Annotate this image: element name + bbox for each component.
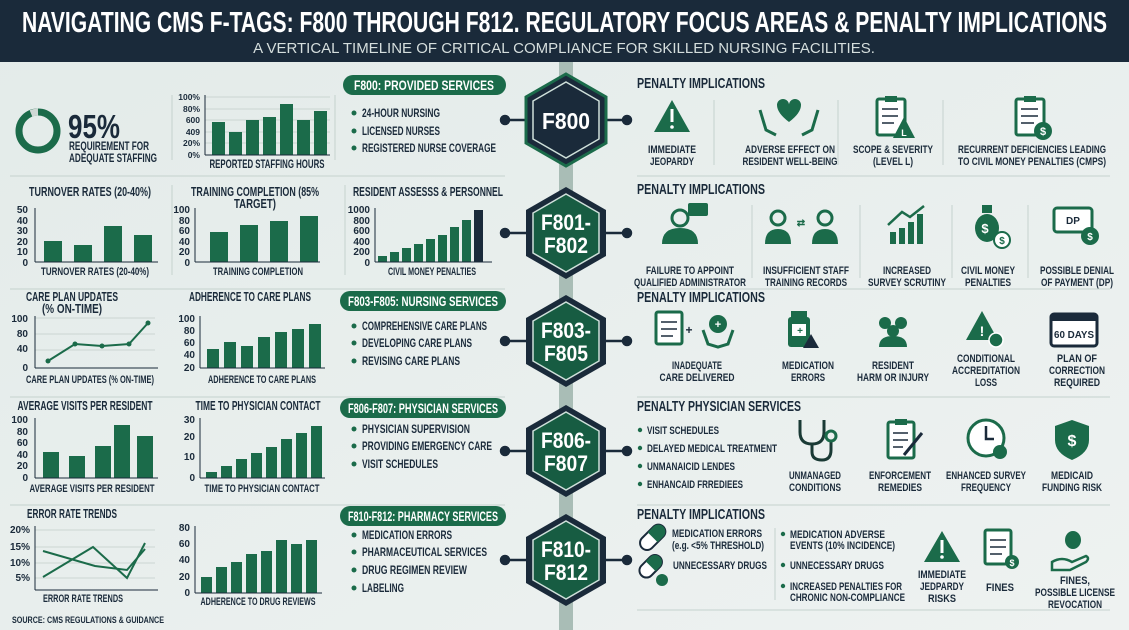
chart: civil money penalties: 0 [364, 258, 370, 269]
panel: F800 provided services: LICENSED NURSES [362, 126, 440, 138]
chart: adherence to drug reviews: 20 [179, 572, 190, 583]
penalty row 5: RISKS [928, 593, 956, 605]
icon: people [879, 317, 907, 347]
chart: error rate trends [10, 507, 158, 605]
penalty row 5: INCREASED PENALTIES FOR [790, 581, 902, 593]
penalty row 3: ACCREDITATION [952, 365, 1020, 377]
penalty row 5: JEDPARDY [920, 581, 964, 593]
icon: clipboard dollar: $ [1040, 126, 1046, 138]
chart: reported staffing hours [178, 92, 330, 171]
chart: reported staffing hours: REPORTED STAFFING HOURS [210, 159, 325, 171]
chart: reported staffing hours: 100% [178, 92, 200, 102]
icon: pill capsule [637, 522, 668, 553]
chart: error rate trends: ERROR RATE TRENDS [43, 593, 123, 605]
penalty row 4: FREQUENCY [961, 482, 1011, 494]
chart: training completion: 0 [184, 258, 190, 269]
icon: shield dollar [1055, 420, 1089, 460]
chart: adherence to drug reviews: 60 [179, 539, 190, 550]
source note: SOURCE: CMS REGULATIONS & GUIDANCE [12, 615, 164, 626]
icon: heart hands [760, 99, 818, 135]
hexagon: F810-F812: F810- [541, 537, 591, 562]
chart: care plan updates: (% ON-TIME) [42, 302, 102, 316]
chart: civil money penalties: 400 [353, 237, 370, 248]
penalty row 1: ADVERSE EFFECT ON [745, 144, 835, 156]
penalty row 5: EVENTS (10% INCIDENCE) [790, 540, 895, 552]
icon: calendar 60 days: 60 DAYS [1054, 330, 1094, 341]
penalty row 3: REQUIRED [1054, 377, 1100, 389]
hexagon: F806-F807: F806- [541, 428, 591, 453]
icon: money bag: $ [999, 236, 1005, 247]
penalty row 3: LOSS [975, 377, 997, 389]
chart: turnover rates [17, 185, 158, 278]
panel: F806-F807 physician services: PROVIDING EMERGENCY CARE [362, 441, 492, 453]
hexagon: F810-F812: F812 [544, 560, 588, 585]
penalty row 3: CARE DELIVERED [660, 372, 735, 384]
icon: care plan + hands: + [715, 319, 721, 331]
penalty row 1 [637, 75, 1106, 168]
penalty row 3: CONDITIONAL [957, 353, 1015, 365]
penalty row 5 [637, 506, 1115, 611]
chart: reported staffing hours: 20% [183, 138, 200, 148]
penalty row 2: TRAINING RECORDS [765, 277, 847, 289]
icon: medication bottle: + [797, 326, 803, 337]
penalty row 2: INCREASED [883, 265, 931, 277]
chart: time to physician contact: 10 [184, 452, 195, 463]
penalty row 5: MEDICATION ERRORS [672, 528, 762, 540]
chart: civil money penalties: 1000 [348, 205, 370, 216]
penalty row 1: IMMEDIATE [648, 144, 696, 156]
chart: average visits per resident: AVERAGE VISITS PER RESIDENT [18, 399, 153, 413]
penalty row 4: UNMANAICID LENDES [647, 461, 735, 473]
penalty row 5: (e.g. <5% THRESHOLD) [672, 540, 764, 552]
chart: average visits per resident: 40 [17, 450, 28, 461]
penalty row 1: (LEVEL L) [873, 156, 913, 168]
chart: time to physician contact: 0 [189, 473, 195, 484]
panel: F800 provided services [343, 75, 506, 155]
icon: calendar 60 days [1051, 314, 1097, 346]
penalty row 3: INADEQUATE [672, 360, 722, 372]
icon: money bag [975, 205, 1010, 248]
icon: medication bottle [788, 311, 819, 348]
penalty row 4: ENFORCEMENT [869, 470, 931, 482]
chart: average visits per resident: 60 [17, 438, 28, 449]
chart: training completion: 20 [179, 247, 190, 258]
icon: clock [968, 420, 1007, 459]
panel: F806-F807 physician services: F806-F807: PHYSICIAN SERVICES [348, 401, 498, 416]
penalty row 4: DELAYED MEDICAL TREATMENT [647, 443, 777, 455]
icon: clipboard level L [877, 96, 915, 138]
chart: training completion [173, 185, 320, 278]
stat: 95% staffing: 95% [68, 108, 120, 145]
stat: 95% staffing: ADEQUATE STAFFING [69, 153, 157, 165]
penalty row 3: CORRECTION [1049, 365, 1105, 377]
hexagon: F803-F805: F805 [544, 341, 588, 366]
penalty row 3: ERRORS [791, 372, 825, 384]
icon: doctor nurse [765, 211, 838, 244]
hexagon: F800 [526, 74, 606, 166]
icon: warning [654, 100, 690, 132]
chart: error rate trends: ERROR RATE TRENDS [27, 507, 117, 521]
chart: adherence to drug reviews: 40 [179, 555, 190, 566]
panel: F810-F812 pharmacy services [340, 506, 506, 595]
chart: adherence to drug reviews [179, 523, 322, 608]
chart: adherence to care plans: ADHERENCE TO CARE PLANS [189, 290, 311, 304]
stat: 95% staffing: REQUIREMENT FOR [69, 141, 149, 153]
icon: warning [924, 531, 960, 562]
penalty row 5: UNNECESSARY DRUGS [673, 560, 767, 572]
penalty row 5: REVOCATION [1048, 599, 1102, 611]
icon: money bag: $ [981, 221, 989, 236]
hexagon: F806-F807: F807 [544, 451, 588, 476]
chart: turnover rates: 50 [17, 205, 28, 216]
chart: training completion: 40 [179, 237, 190, 248]
penalty row 4: FUNDING RISK [1042, 482, 1102, 494]
hexagon: F806-F807 [526, 405, 606, 497]
penalty row 2: FAILURE TO APPOINT [646, 265, 734, 277]
chart: turnover rates: TURNOVER RATES (20-40%) [29, 185, 151, 199]
chart: error rate trends: 20% [10, 525, 30, 536]
chart: time to physician contact: TIME TO PHYSICIAN CONTACT [204, 483, 320, 495]
panel: F806-F807 physician services [340, 398, 506, 471]
chart: adherence to care plans: 40 [184, 350, 195, 361]
chart: care plan updates: 80 [17, 329, 28, 340]
chart: turnover rates: 0 [22, 258, 28, 269]
penalty row 4: ENHANCED SURVEY [946, 470, 1026, 482]
chart: turnover rates: TURNOVER RATES (20-40%) [41, 266, 149, 278]
panel: F803-F805 nursing services: COMPREHENSIVE CARE PLANS [362, 321, 487, 333]
icon: care plan + hands [656, 312, 733, 347]
penalty row 4: UNMANAGED [789, 470, 841, 482]
chart: adherence to care plans: 100 [178, 314, 195, 325]
penalty row 2: QUALIFIED ADMINISTRATOR [634, 277, 746, 289]
chart: care plan updates: 100 [11, 314, 28, 325]
panel: F800 provided services: REGISTERED NURSE COVERAGE [362, 143, 496, 155]
panel: F810-F812 pharmacy services: F810-F812: PHARMACY SERVICES [348, 509, 498, 524]
penalty row 3: PLAN OF [1057, 353, 1097, 365]
icon: warning shield: ! [980, 323, 984, 339]
hexagon: F803-F805 [526, 295, 606, 387]
penalty row 2 [634, 181, 1114, 289]
chart: care plan updates: CARE PLAN UPDATES (% ON-TIME) [26, 374, 154, 386]
icon: DP bill: $ [1087, 232, 1093, 243]
chart: reported staffing hours: 600 [186, 115, 200, 125]
chart: time to physician contact: 30 [184, 415, 195, 426]
chart: civil money penalties: 800 [353, 216, 370, 227]
panel: F803-F805 nursing services [340, 291, 506, 368]
chart: training completion: 60 [179, 226, 190, 237]
chart: training completion: 80 [179, 216, 190, 227]
chart: adherence to care plans [178, 290, 325, 386]
icon: pills [637, 552, 668, 586]
chart: adherence to drug reviews: 0 [184, 588, 190, 599]
chart: care plan updates: 40 [17, 344, 28, 355]
chart: error rate trends: 15% [10, 542, 30, 553]
chart: turnover rates: 10 [17, 247, 28, 258]
penalty row 1: JEOPARDY [650, 156, 694, 168]
penalty row 2: SURVEY SCRUTINY [868, 277, 946, 289]
icon: fines clipboard: $ [1009, 558, 1015, 568]
chart: adherence to drug reviews: ADHERENCE TO DRUG REVIEWS [200, 596, 316, 608]
icon: DP bill [1054, 208, 1099, 245]
penalty row 4: CONDITIONS [789, 482, 841, 494]
chart: training completion: TARGET) [234, 197, 276, 211]
chart: time to physician contact [184, 399, 325, 495]
penalty row 1: PENALTY IMPLICATIONS [637, 75, 765, 92]
panel: F810-F812 pharmacy services: DRUG REGIMEN REVIEW [362, 565, 467, 577]
penalty row 5: IMMEDIATE [918, 569, 966, 581]
penalty row 3: RESIDENT [872, 360, 914, 372]
penalty row 4 [637, 398, 1102, 494]
panel: F810-F812 pharmacy services: PHARMACEUTICAL SERVICES [362, 547, 487, 559]
hexagon: F810-F812 [526, 514, 606, 606]
penalty row 5: UNNECESSARY DRUGS [790, 560, 884, 572]
hexagon: F803-F805: F803- [541, 318, 591, 343]
chart: civil money penalties: CIVIL MONEY PENALTIES [388, 266, 476, 278]
chart: adherence to drug reviews: 80 [179, 523, 190, 534]
penalty row 2: PENALTIES [965, 277, 1011, 289]
panel: F810-F812 pharmacy services: LABELING [362, 583, 404, 595]
header: A VERTICAL TIMELINE OF CRITICAL COMPLIANCE FOR SKILLED NURSING FACILITIES. [253, 40, 875, 57]
chart: training completion: TRAINING COMPLETION [213, 266, 303, 278]
icon: administrator [662, 203, 708, 244]
penalty row 3 [637, 289, 1105, 389]
panel: F803-F805 nursing services: F803-F805: NURSING SERVICES [348, 294, 498, 309]
chart: average visits per resident: 20 [17, 461, 28, 472]
penalty row 5: FINES, [1060, 575, 1090, 587]
chart: turnover rates: 40 [17, 216, 28, 227]
penalty row 4: REMEDIES [878, 482, 922, 494]
chart: average visits per resident: 100 [11, 415, 28, 426]
penalty row 1: SCOPE & SEVERITY [853, 144, 933, 156]
chart: training completion: 100 [173, 205, 190, 216]
panel: F800 provided services: 24-HOUR NURSING [362, 108, 440, 120]
chart: civil money penalties: RESIDENT ASSESSS & PERSONNEL [353, 185, 503, 199]
timeline spine [501, 62, 631, 630]
icon: rising chart [888, 206, 924, 244]
hexagon: F801-F802 [526, 187, 606, 279]
icon: hand money bag [1052, 531, 1088, 570]
penalty row 2: INSUFFICIENT STAFF [763, 265, 849, 277]
icon: DP bill: DP [1066, 216, 1080, 227]
icon: care plan + hands: + [685, 323, 693, 337]
penalty row 5: PENALTY IMPLICATIONS [637, 506, 765, 523]
hexagon: F801-F802: F802 [544, 233, 588, 258]
penalty row 2: CIVIL MONEY [961, 265, 1015, 277]
penalty row 3: PENALTY IMPLICATIONS [637, 289, 765, 306]
chart: civil money penalties: 200 [353, 247, 370, 258]
icon: warning shield [966, 311, 1003, 347]
icon: enforcement clipboard [888, 419, 922, 458]
chart: adherence to care plans: ADHERENCE TO CARE PLANS [208, 374, 316, 386]
chart: training completion: TRAINING COMPLETION (85% [191, 185, 319, 199]
chart: civil money penalties: 600 [353, 226, 370, 237]
chart: reported staffing hours: 409 [186, 127, 200, 137]
chart: care plan updates: CARE PLAN UPDATES [26, 290, 118, 304]
chart: care plan updates: 0 [22, 363, 28, 374]
chart: turnover rates: 20 [17, 237, 28, 248]
panel: F800 provided services: F800: PROVIDED SERVICES [354, 78, 494, 93]
chart: time to physician contact: TIME TO PHYSICIAN CONTACT [196, 399, 321, 413]
penalty row 4: ENHANCAID FRREDIEES [647, 479, 743, 491]
chart: civil money penalties [348, 185, 503, 278]
chart: care plan updates [11, 290, 158, 386]
panel: F803-F805 nursing services: DEVELOPING CARE PLANS [362, 338, 472, 350]
penalty row 3: MEDICATION [782, 360, 834, 372]
chart: average visits per resident [11, 399, 158, 495]
icon: clipboard level L: L [901, 128, 907, 138]
icon: shield dollar: $ [1068, 433, 1077, 450]
chart: adherence to care plans: 20 [184, 363, 195, 374]
penalty row 2: PENALTY IMPLICATIONS [637, 181, 765, 198]
icon: stethoscope [800, 420, 836, 460]
penalty row 4: VISIT SCHEDULES [647, 425, 719, 437]
chart: reported staffing hours: 80% [183, 104, 200, 114]
penalty row 1: RESIDENT WELL-BEING [742, 156, 838, 168]
chart: reported staffing hours: 0% [188, 150, 200, 160]
panel: F806-F807 physician services: PHYSICIAN SUPERVISION [362, 424, 470, 436]
penalty row 4: MEDICAID [1051, 470, 1093, 482]
chart: average visits per resident: 80 [17, 427, 28, 438]
stat: 95% staffing [19, 108, 157, 165]
penalty row 5: CHRONIC NON-COMPLIANCE [790, 592, 905, 604]
chart: error rate trends: 10% [10, 558, 30, 569]
chart: average visits per resident: 0 [22, 473, 28, 484]
chart: time to physician contact: 20 [184, 432, 195, 443]
chart: error rate trends: 5% [16, 573, 30, 584]
penalty row 4: PENALTY PHYSICIAN SERVICES [637, 398, 801, 415]
penalty row 3: HARM OR INJURY [857, 372, 929, 384]
hexagon: F801-F802: F801- [541, 210, 591, 235]
icon: fines clipboard [985, 530, 1019, 569]
panel: F803-F805 nursing services: REVISING CARE PLANS [362, 356, 460, 368]
penalty row 5: MEDICATION ADVERSE [790, 529, 885, 541]
chart: turnover rates: 30 [17, 226, 28, 237]
panel: F810-F812 pharmacy services: MEDICATION ERRORS [362, 530, 452, 542]
chart: adherence to care plans: 80 [184, 326, 195, 337]
panel: F806-F807 physician services: VISIT SCHEDULES [362, 459, 438, 471]
icon: clipboard dollar [1016, 96, 1052, 140]
icon: doctor nurse: ⇄ [797, 218, 806, 229]
chart: average visits per resident: AVERAGE VISITS PER RESIDENT [30, 483, 155, 495]
penalty row 5: FINES [986, 582, 1014, 594]
header [0, 0, 1129, 62]
hexagon: F800: F800 [542, 108, 590, 134]
chart: adherence to care plans: 60 [184, 338, 195, 349]
